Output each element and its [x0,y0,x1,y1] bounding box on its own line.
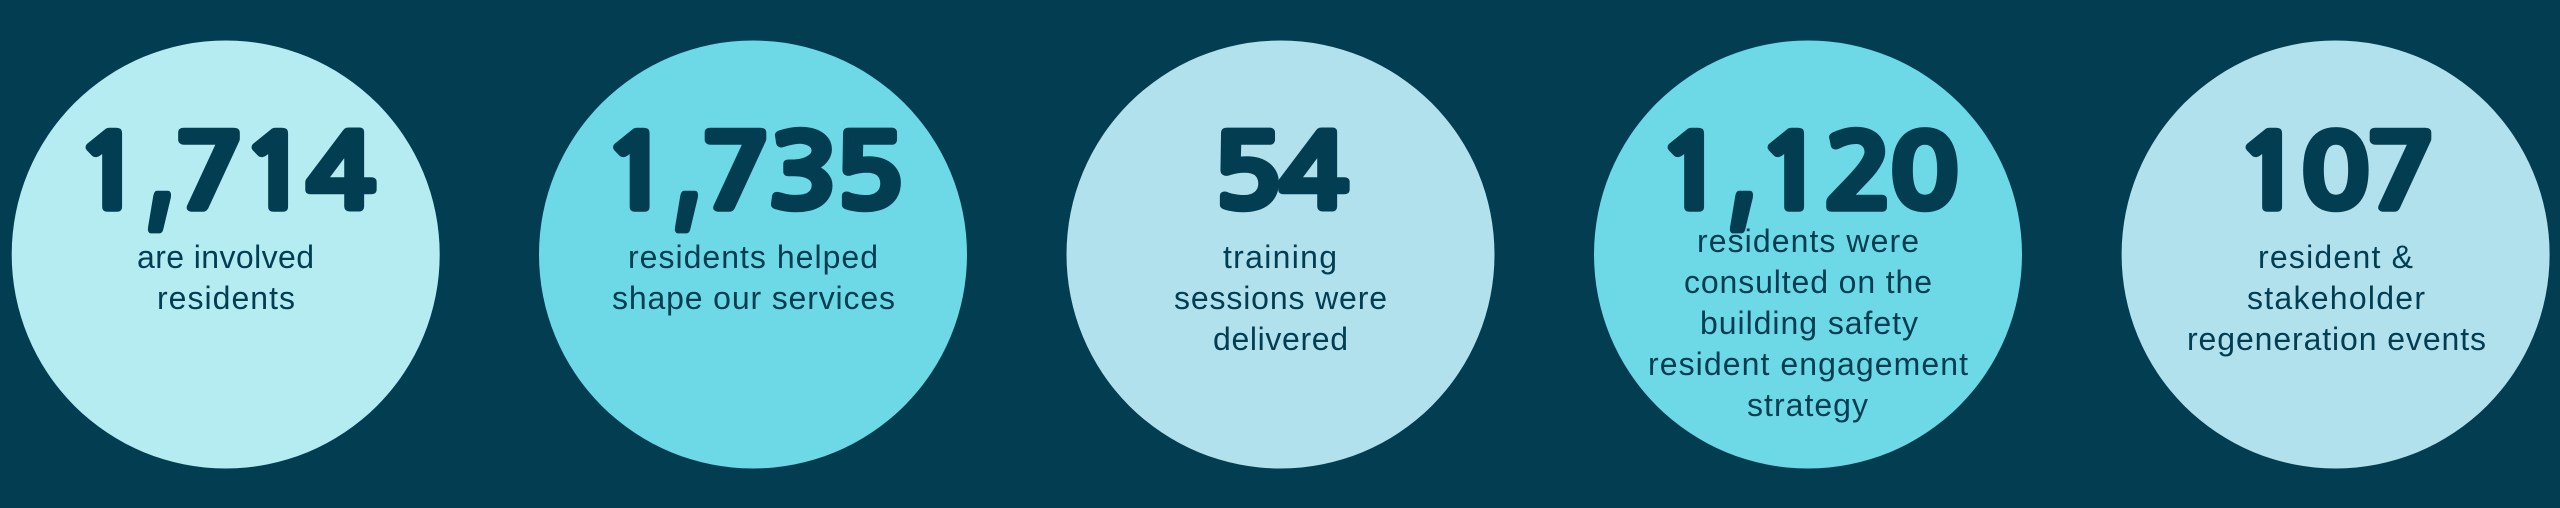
caption: are involved [137,239,314,275]
caption: training [1223,239,1337,275]
number: 1,735: 735 [701,123,905,224]
caption [1648,223,1968,423]
circle [539,40,967,468]
caption: regeneration events [2187,321,2486,357]
caption: consulted on the [1684,264,1932,300]
caption: residents [157,280,295,316]
panel: 1,735 residents helped [539,40,967,468]
circle [1066,40,1494,468]
panel: 1,714 involved residents [12,40,440,468]
panel: 1,120 residents consulted [1594,40,2022,468]
panel: 54 training sessions [1066,40,1494,468]
number: 1,714: 1 [74,123,145,224]
number: 1,714: , [144,58,176,232]
caption [1174,239,1387,357]
panel: 107 regeneration events [2122,40,2550,468]
number: 1,120: 1 [1656,123,1727,224]
number: 1,735: , [671,58,703,232]
circle [12,40,440,468]
number: 1,120: 120 [1756,123,1960,224]
caption: shape our services [612,280,895,316]
number: 1,120 [1656,58,1960,232]
number: 1,714: 714 [174,123,376,224]
caption [137,239,314,316]
caption: residents helped [628,239,878,275]
caption: stakeholder [2247,280,2425,316]
caption: residents were [1697,223,1919,259]
number: 1,120: , [1726,58,1758,232]
circle [1594,40,2022,468]
number: 54: 54 [1212,123,1349,224]
caption: delivered [1213,321,1348,357]
caption [612,239,895,316]
caption [2187,239,2486,357]
caption: building safety [1700,305,1918,341]
number: 107: 107 [2234,123,2436,224]
caption: sessions were [1174,280,1387,316]
caption: resident & [2258,239,2413,275]
circle [2122,40,2550,468]
number: 1,735: 1 [602,123,672,224]
number: 1,714 [74,58,376,232]
caption: strategy [1747,387,1868,423]
number: 1,735 [602,58,905,232]
caption: resident engagement [1648,346,1968,382]
